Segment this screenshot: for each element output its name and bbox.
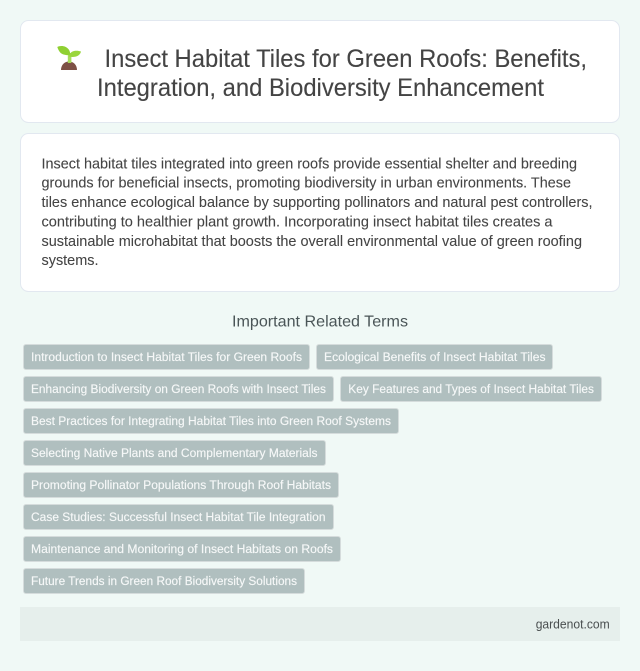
title: Integration, and Biodiversity Enhancement	[97, 74, 544, 102]
text block: description: contributing to healthier plant growth. Incorporating insect habitat tiles creates a	[42, 214, 553, 230]
tag: Ecological Benefits of Insect Habitat Tiles	[324, 350, 546, 364]
text block: description	[42, 156, 592, 269]
text block: description: tiles enhance ecological balance by supporting pollinators and natural pest controllers,	[42, 195, 592, 211]
tag	[24, 408, 398, 434]
tag: Case Studies: Successful Insect Habitat Tile Integration	[31, 510, 326, 524]
tag: Maintenance and Monitoring of Insect Habitats on Roofs	[31, 542, 333, 556]
title	[97, 45, 587, 102]
tag	[24, 440, 326, 466]
tag: Key Features and Types of Insect Habitat Tiles	[348, 382, 594, 396]
tag: Future Trends in Green Roof Biodiversity Solutions	[31, 574, 297, 588]
tag: Introduction to Insect Habitat Tiles for Green Roofs	[31, 350, 302, 364]
panel: description card	[20, 134, 620, 292]
tag	[24, 472, 338, 498]
tag	[316, 344, 552, 370]
tag: Best Practices for Integrating Habitat Tiles into Green Roof Systems	[31, 414, 391, 428]
panel: title card	[20, 20, 620, 122]
tag	[24, 344, 310, 370]
footer text: site name: gardenot.com	[536, 617, 610, 631]
text block: description: Insect habitat tiles integrated into green roofs provide essential shelter and breeding	[42, 156, 577, 172]
tag	[340, 376, 602, 402]
text block: description: grounds for beneficial insects, promoting biodiversity in urban environments. These	[42, 176, 571, 192]
footer	[20, 607, 620, 641]
heading: related terms: Important Related Terms	[232, 314, 408, 330]
title: Insect Habitat Tiles for Green Roofs: Benefits,	[104, 45, 587, 73]
tag: Selecting Native Plants and Complementary Materials	[31, 446, 318, 460]
text block: description: sustainable microhabitat that boosts the overall environmental value of green roofing	[42, 234, 582, 250]
panel: related term tags	[24, 344, 602, 594]
tag: Promoting Pollinator Populations Through Roof Habitats	[31, 478, 331, 492]
tag	[24, 376, 334, 402]
text block: description: systems.	[42, 253, 98, 269]
tag	[24, 568, 304, 594]
icon: seedling	[57, 46, 81, 70]
tag	[24, 536, 340, 562]
tag: Enhancing Biodiversity on Green Roofs with Insect Tiles	[31, 382, 326, 396]
tag	[24, 504, 334, 530]
